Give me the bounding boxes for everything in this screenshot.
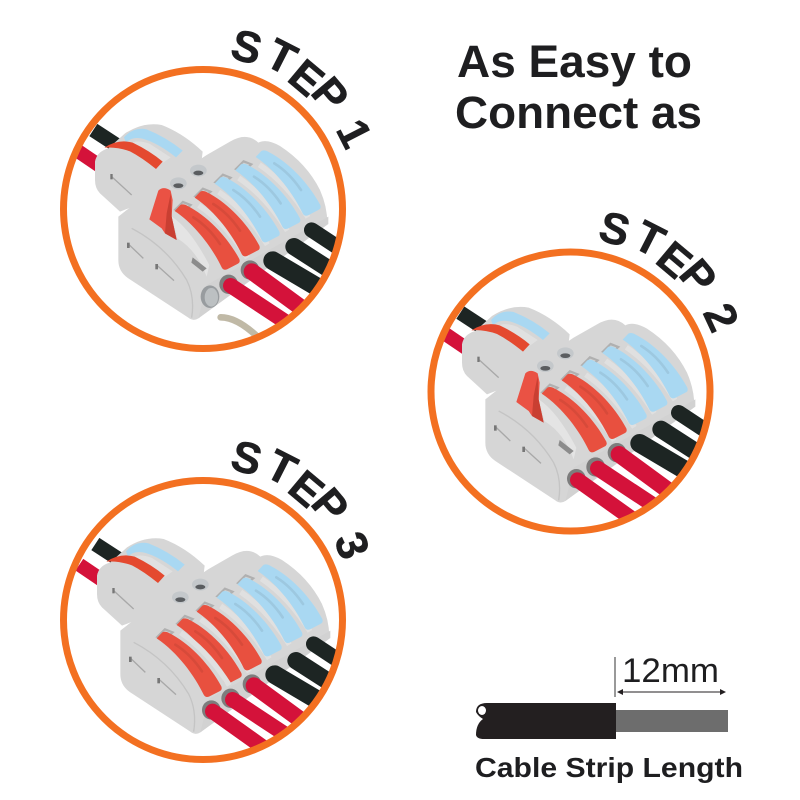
step 1 connector photo illustration <box>77 124 340 336</box>
step 1 label: T <box>258 29 305 85</box>
panel: cable strip length <box>475 652 743 783</box>
cable caption: Cable Strip Length <box>475 752 743 783</box>
step 1 label: 1 <box>326 112 381 156</box>
title <box>455 36 702 138</box>
step 2 label: S <box>594 202 635 257</box>
stripped conductor <box>616 710 728 732</box>
dimension marker line <box>614 657 616 697</box>
step 1 label: P <box>302 68 358 122</box>
step 1 label: E <box>279 50 333 106</box>
step 2 label: P <box>670 250 726 304</box>
title: Connect as <box>455 87 702 138</box>
step 3 label: P <box>302 479 358 533</box>
step 1 orange ring <box>64 70 342 348</box>
panel: step 1 <box>64 20 381 349</box>
cable end highlight <box>478 706 486 715</box>
step 3 label: T <box>258 440 305 496</box>
step 2 label: E <box>647 232 701 288</box>
panel: step 3 <box>64 431 379 760</box>
step 3 label: 3 <box>324 526 379 565</box>
step 2 label: 2 <box>693 296 748 339</box>
step 3 label: E <box>279 461 333 517</box>
step 3 orange ring <box>64 480 342 760</box>
step 2 connector photo illustration <box>444 307 707 520</box>
step 3 connector photo illustration <box>79 538 342 751</box>
step 3 label: S <box>226 431 267 486</box>
cable insulation <box>476 703 616 739</box>
dimension value: 12mm <box>622 652 719 690</box>
step 2 orange ring <box>431 252 710 531</box>
step 3 label <box>226 431 379 565</box>
title: As Easy to <box>457 36 692 87</box>
step 2 label: T <box>626 211 673 267</box>
step 2 label <box>594 202 748 339</box>
dimension arrow <box>617 689 726 695</box>
step 1 label <box>226 20 381 156</box>
panel: step 2 <box>431 202 748 531</box>
step 1 label: S <box>226 20 267 75</box>
